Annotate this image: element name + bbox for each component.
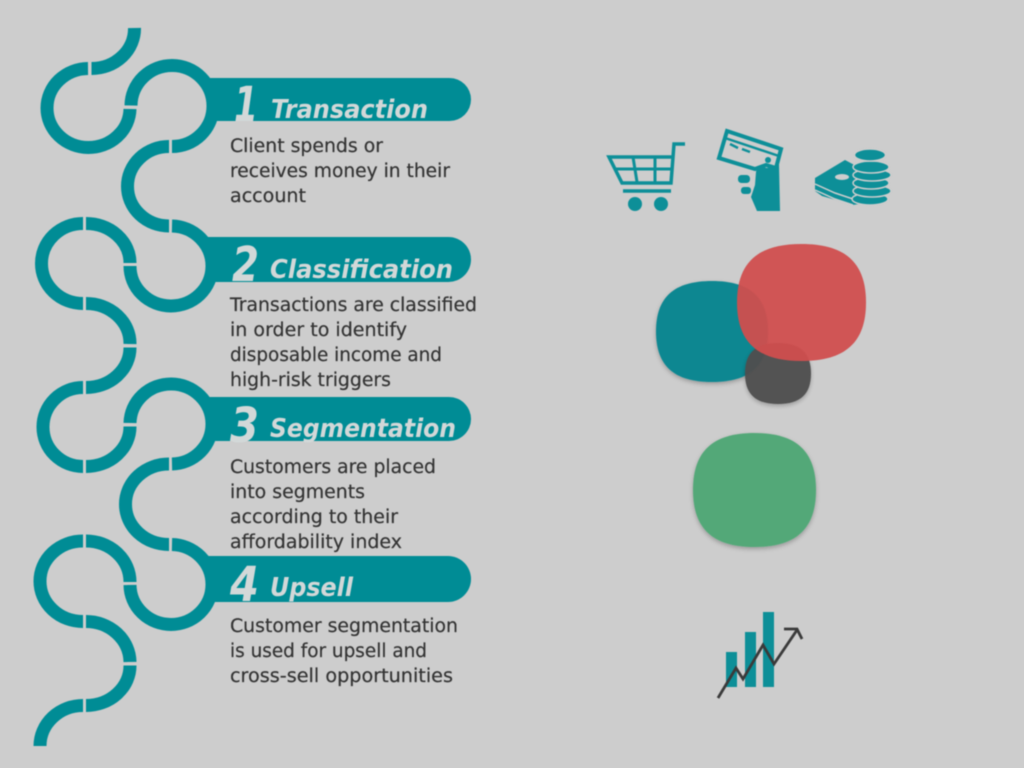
serpentine ribbon path bbox=[40, 28, 213, 746]
description 1 bbox=[230, 136, 450, 207]
overlapping rounded blobs bbox=[656, 244, 866, 404]
icon: rising bar chart bbox=[718, 612, 802, 698]
description 2: high-risk triggers bbox=[230, 370, 391, 391]
heading: Segmentation: Segmentation bbox=[270, 414, 456, 444]
description 2: Transactions are classified bbox=[229, 295, 477, 316]
banner 2 bbox=[207, 237, 471, 282]
banner 4 bbox=[207, 556, 471, 602]
icon: coins and banknotes bbox=[815, 149, 891, 205]
icon: hand holding card bbox=[719, 131, 781, 211]
banner 1 bbox=[207, 78, 471, 121]
description 1: account bbox=[230, 186, 306, 207]
description 4: cross-sell opportunities bbox=[230, 666, 453, 687]
description 3: according to their bbox=[230, 507, 398, 528]
description 1: Client spends or bbox=[230, 136, 383, 157]
description 2: disposable income and bbox=[230, 345, 442, 366]
description 3: into segments bbox=[230, 482, 365, 503]
heading: Classification: Classification bbox=[270, 255, 453, 285]
description 3: Customers are placed bbox=[230, 457, 436, 478]
number 4: 4 bbox=[229, 557, 259, 613]
number 2: 2 bbox=[232, 237, 259, 293]
banner 3 bbox=[207, 397, 471, 441]
blob: red bbox=[737, 244, 866, 361]
description 2: in order to identify bbox=[230, 320, 407, 341]
blob: green bbox=[693, 433, 816, 547]
description 4 bbox=[230, 616, 458, 687]
blob: dark grey bbox=[745, 343, 811, 404]
heading: Upsell: Upsell bbox=[270, 573, 354, 603]
description 4: Customer segmentation bbox=[230, 616, 458, 637]
description 2 bbox=[229, 295, 477, 391]
step 1: transaction bbox=[207, 77, 471, 207]
description 3: affordability index bbox=[230, 532, 402, 553]
number 1: 1 bbox=[234, 77, 258, 133]
description 4: is used for upsell and bbox=[230, 641, 427, 662]
icon: shopping cart bbox=[609, 144, 685, 211]
number 3: 3 bbox=[230, 398, 259, 454]
step 2: classification bbox=[207, 237, 477, 391]
description 1: receives money in their bbox=[230, 161, 450, 182]
step 3: segmentation bbox=[207, 397, 471, 553]
blob: teal bbox=[656, 281, 768, 382]
step 4: upsell bbox=[207, 556, 471, 687]
heading: Transaction: Transaction bbox=[271, 95, 428, 125]
description 3 bbox=[230, 457, 436, 553]
